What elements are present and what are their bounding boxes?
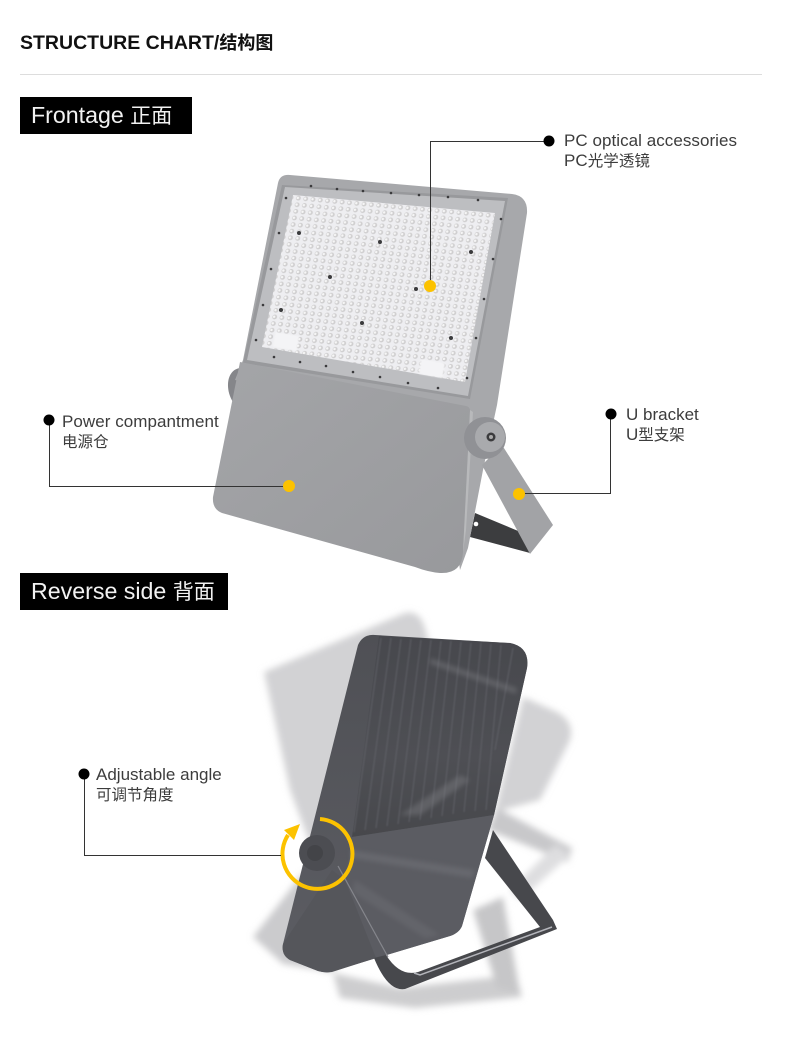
label: Adjustable angle: 可调节角度: [96, 787, 174, 804]
callout markers: [44, 136, 616, 780]
rear stand: [470, 513, 535, 553]
label: Power compartment: Power compantment: [62, 412, 219, 431]
cooling fins: [352, 636, 527, 837]
glass rim: [243, 185, 508, 399]
label: Adjustable angle: [96, 765, 222, 804]
bracket arm: [482, 445, 553, 554]
label: PC optical accessories: PC optical accessories: [564, 131, 737, 150]
label: U bracket: U型支架: [626, 425, 685, 444]
callout lines: [50, 142, 610, 856]
fin reflections: [400, 658, 517, 815]
left knob: [228, 368, 240, 402]
label: PC optical accessories: PC光学透镜: [564, 151, 650, 170]
back lamp: [253, 612, 572, 1008]
label: Adjustable angle: Adjustable angle: [96, 765, 222, 784]
U bracket: [374, 830, 557, 989]
housing: [283, 635, 527, 972]
label: U bracket: U bracket: [626, 405, 699, 424]
housing: [235, 175, 527, 570]
lower plate: [345, 815, 494, 958]
knob: [464, 417, 506, 459]
title: STRUCTURE CHART/结构图: [20, 32, 273, 54]
heading: Reverse side: Reverse side 背面: [31, 578, 215, 604]
pivot knob: [299, 835, 335, 871]
label: Power compartment: 电源仓: [62, 434, 109, 451]
heading: Frontage: Frontage 正面: [31, 102, 172, 128]
power compartment: [213, 362, 470, 573]
lens screws: [255, 185, 502, 389]
label: U bracket: [626, 405, 699, 444]
heading: Reverse side: [20, 573, 228, 610]
label: PC optical accessories: [564, 131, 737, 170]
front lamp: [213, 175, 553, 573]
label: Power compartment: [62, 412, 219, 451]
heading: Frontage: [20, 97, 192, 134]
label smudges: [273, 332, 445, 378]
rotation arrow: [282, 819, 352, 889]
motion ghosts: [253, 612, 572, 1008]
LED panel: [262, 195, 495, 382]
